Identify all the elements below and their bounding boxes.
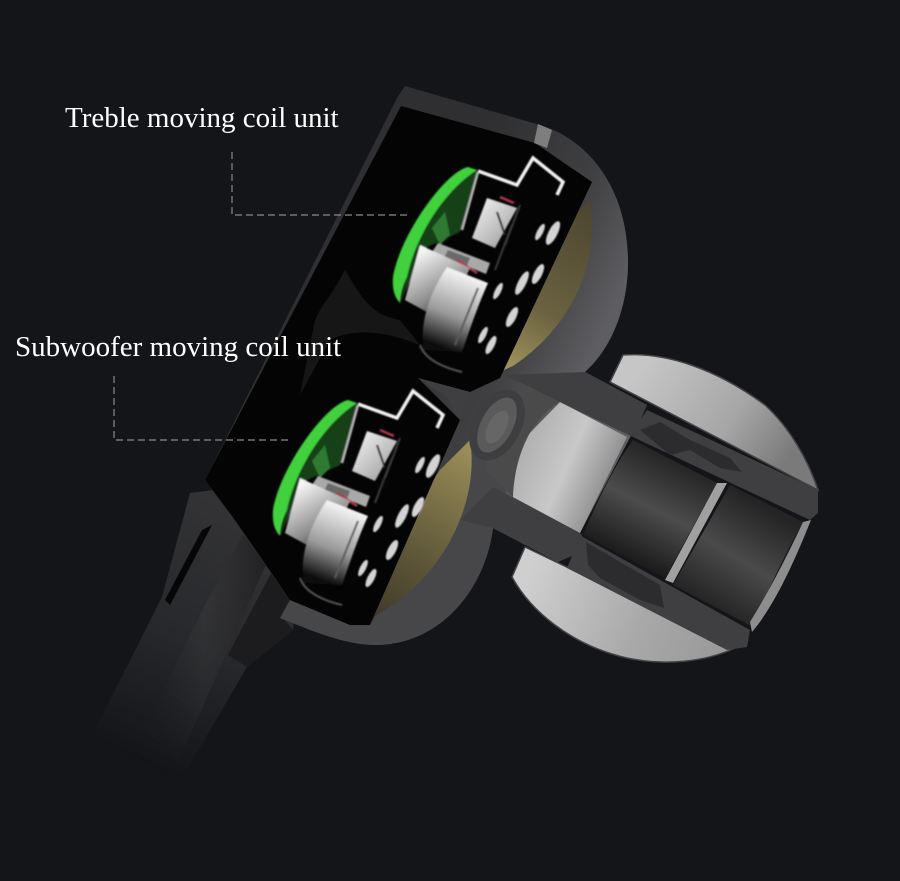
- interior black cavity: [205, 106, 592, 625]
- spacer ring: [665, 483, 727, 583]
- cavity inner divider: [300, 270, 420, 395]
- earphone cutaway illustration with labels: [16, 86, 820, 742]
- treble leader line: [232, 152, 408, 215]
- nozzle: inner chamber: [509, 402, 627, 533]
- earbud outer shell: [205, 86, 647, 645]
- divider between drivers: [418, 378, 470, 420]
- filter cylinder two: [673, 485, 803, 627]
- foam texture: [586, 422, 742, 608]
- nozzle lower wall: [460, 487, 750, 650]
- nozzle ring: [463, 385, 560, 497]
- shell seam: [534, 124, 552, 148]
- cable strain relief: [116, 490, 294, 742]
- treble label: [65, 102, 408, 215]
- gold diaphragm upper: [490, 200, 592, 376]
- subwoofer leader line: [114, 376, 290, 440]
- tube end highlight: [750, 520, 811, 632]
- ear tip: silicone dome: [512, 355, 818, 662]
- filter cylinder one: [583, 440, 717, 578]
- subwoofer label: Subwoofer moving coil unit: [15, 331, 341, 363]
- lower shell tone: [280, 450, 510, 645]
- treble label: Treble moving coil unit: [65, 102, 339, 134]
- gold diaphragm lower: [350, 440, 472, 624]
- subwoofer driver: [273, 391, 443, 605]
- nozzle upper wall: [505, 372, 818, 520]
- treble driver: [393, 158, 563, 372]
- subwoofer label: [15, 331, 341, 440]
